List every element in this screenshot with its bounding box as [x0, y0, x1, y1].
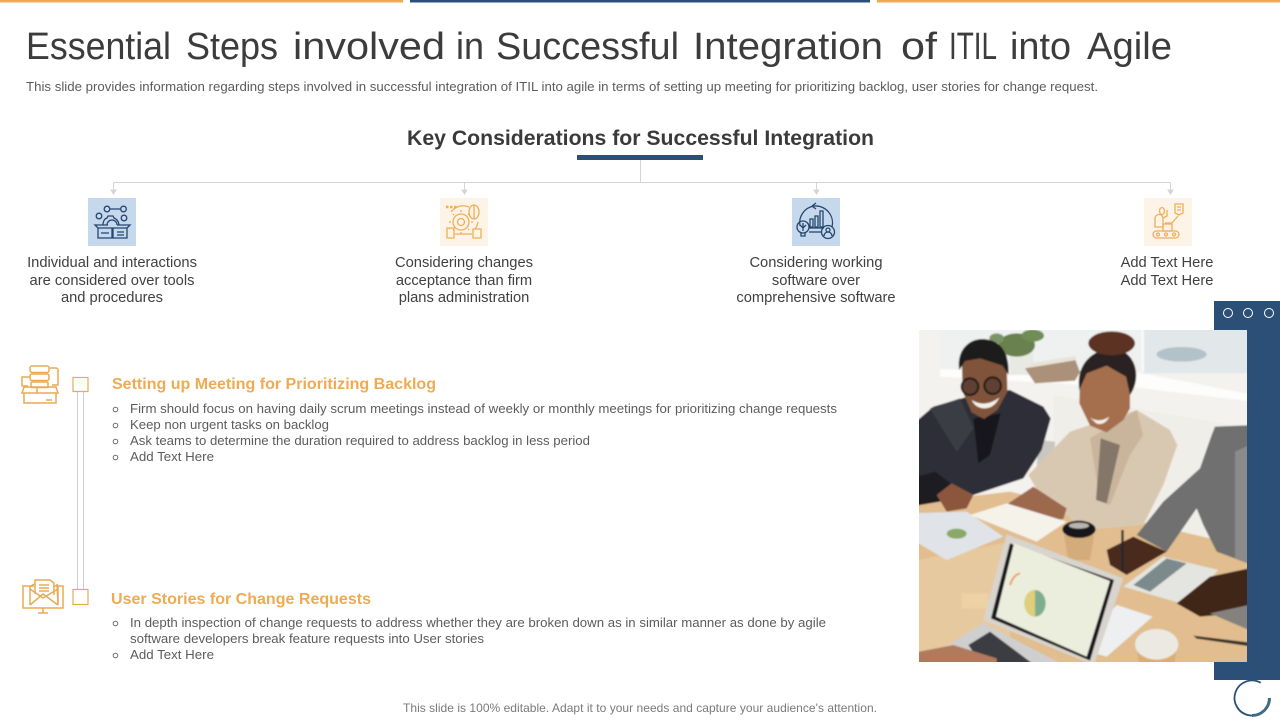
label: considering changes: acceptance than firm [396, 273, 532, 289]
title: Essential [26, 26, 171, 68]
connector tree [111, 160, 1173, 194]
title: Integration [693, 26, 883, 68]
section 1 bullets: Ask teams to determine the duration required to address backlog in less period [130, 433, 590, 448]
title: involved [293, 26, 445, 68]
section 2 bullets: In depth inspection of change requests to address whether they are broken down as in similar manner as done by agile [130, 615, 826, 630]
icon: person presenting [1144, 198, 1192, 246]
woman [1028, 410, 1177, 530]
label: considering changes: Considering changes [395, 255, 533, 271]
title: Steps [186, 26, 278, 68]
label: add text here [1121, 255, 1213, 289]
label: considering working software: comprehensive software [736, 290, 896, 306]
label: individual and interactions: and procedures [61, 290, 163, 306]
label: considering changes [395, 255, 533, 306]
section 2 bullets: Add Text Here [130, 647, 214, 662]
label: add text here: Add Text Here [1121, 273, 1213, 289]
section 2 heading: User Stories for Change Requests [111, 591, 371, 608]
label: add text here: Add Text Here [1121, 255, 1213, 271]
laptop [1077, 605, 1153, 657]
man [910, 390, 1051, 503]
icon: server box [22, 366, 58, 403]
title: ITIL [949, 26, 996, 68]
icon: mail on monitor [23, 580, 63, 613]
label: considering working software: software over [772, 273, 860, 289]
title: in [456, 26, 484, 68]
right person [1137, 425, 1257, 567]
title: Successful [496, 26, 679, 68]
section 1 bullets: Add Text Here [130, 449, 214, 464]
section heading [407, 127, 874, 160]
icon: tools and interactions [88, 198, 136, 246]
section 1 bullets [113, 401, 837, 464]
section 2 bullets [113, 615, 826, 662]
label: considering working software: Considering working [749, 255, 883, 271]
label: considering working software [736, 255, 896, 306]
section 2 bullets: software developers break feature requests into User stories [130, 631, 485, 646]
title: of [901, 26, 937, 68]
loader ring [1234, 680, 1270, 716]
photo: team meeting around a table [919, 330, 1247, 662]
icon: changes acceptance [440, 198, 488, 246]
section 1 bullets: Firm should focus on having daily scrum meetings instead of weekly or monthly meetings for prioritizing change requests [130, 401, 837, 416]
cup [1064, 535, 1094, 560]
paper and notebook [910, 512, 1003, 560]
icon: working software [792, 198, 840, 246]
footer note: This slide is 100% editable. Adapt it to your needs and capture your audience's attention. [403, 701, 877, 715]
section 1 heading: Setting up Meeting for Prioritizing Backlog [112, 376, 436, 393]
label: individual and interactions: Individual and interactions [27, 255, 197, 271]
timeline connector [73, 378, 88, 604]
tablet and right hand [1123, 557, 1218, 605]
label: considering changes: plans administration [399, 290, 529, 306]
title: into [1010, 26, 1071, 68]
top accent bar [0, 0, 1280, 2]
table [910, 492, 1257, 672]
title: Agile [1087, 26, 1172, 68]
label: individual and interactions [27, 255, 197, 306]
front cup [1137, 648, 1177, 672]
section 1 bullets: Keep non urgent tasks on backlog [130, 417, 329, 432]
decorative panel behind photo [1214, 301, 1280, 680]
subtitle: This slide provides information regarding steps involved in successful integration of ITIL into agile in terms of setting up meeting for prioritizing backlog, user stories for change request. [26, 79, 1098, 94]
label: individual and interactions: are considered over tools [30, 273, 194, 289]
section heading: Key Considerations for Successful Integration [407, 127, 874, 150]
